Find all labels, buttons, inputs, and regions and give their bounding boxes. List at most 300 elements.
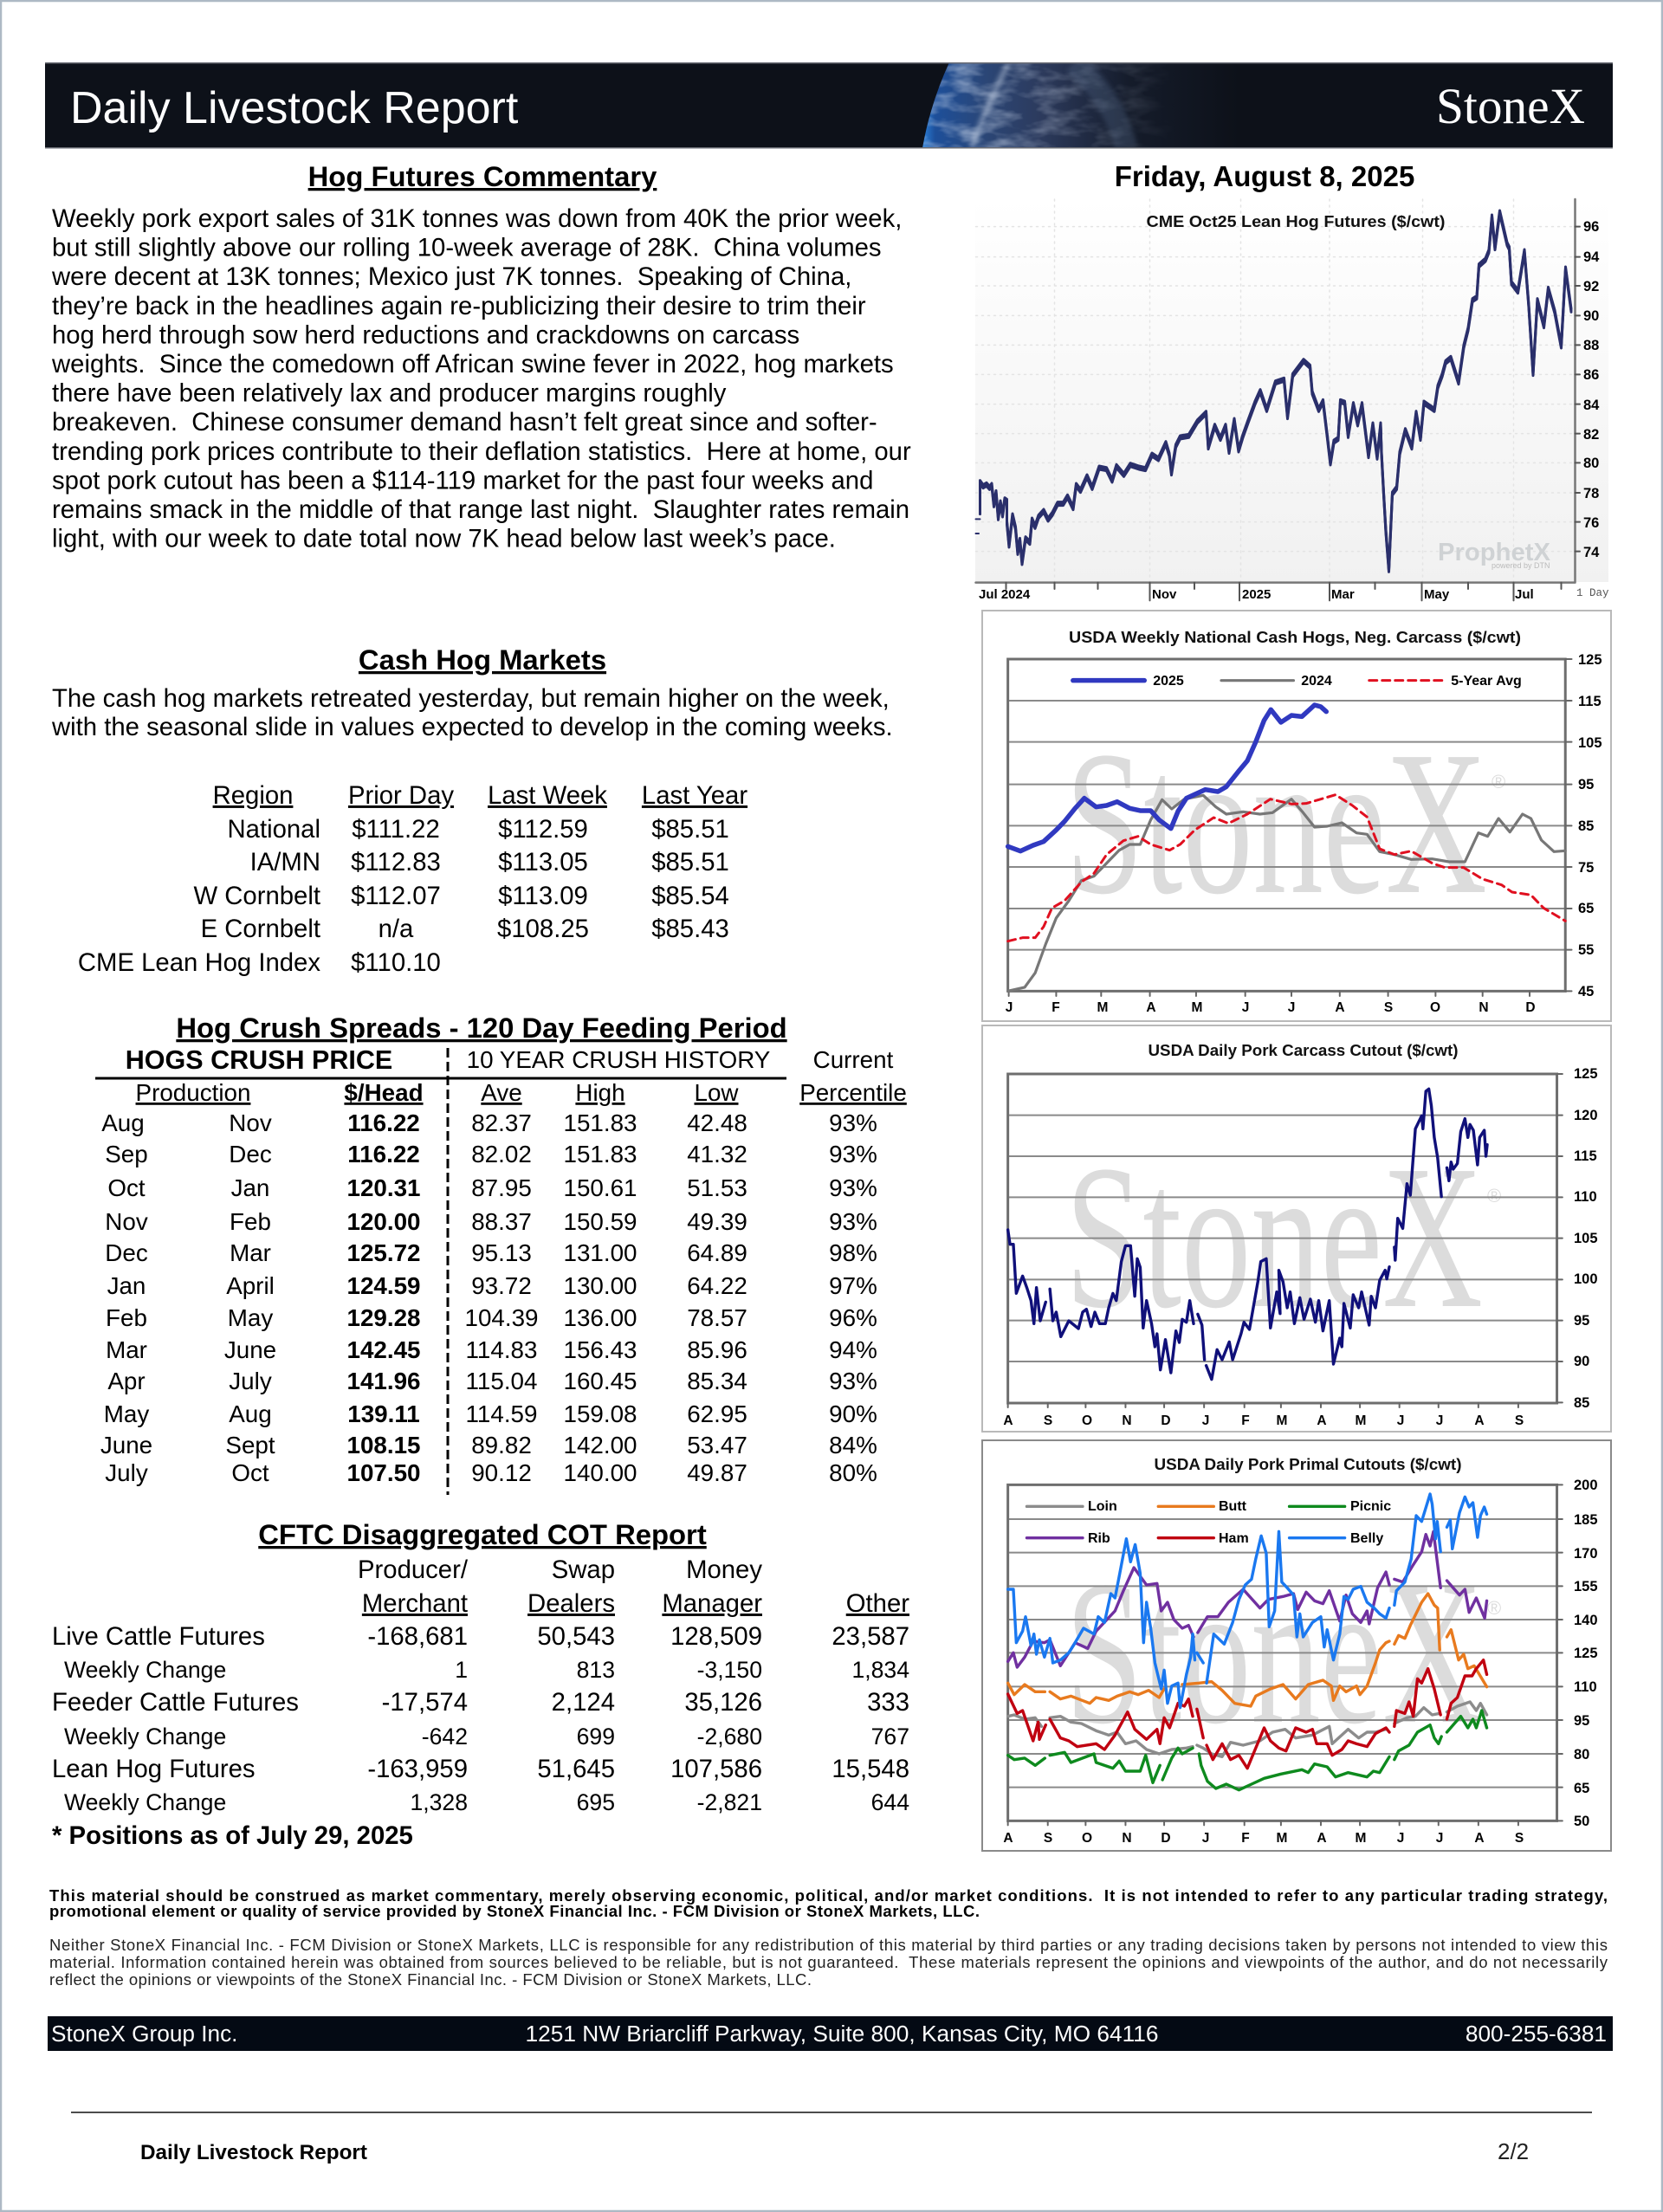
- CFTC table: Other: [846, 1589, 909, 1618]
- hog crush table: 150.61: [563, 1174, 637, 1201]
- y axis labels: 45: [1578, 984, 1594, 999]
- price axis labels: 86: [1583, 367, 1599, 383]
- hog crush table: Feb: [230, 1208, 271, 1235]
- hog crush table: 140.00: [563, 1459, 637, 1486]
- cash hog table: IA/MN: [250, 848, 320, 876]
- watermark: ProphetX: ProphetX: [1438, 539, 1551, 566]
- contact footer bar: StoneX Group Inc.: [51, 2021, 237, 2047]
- CFTC table: Producer/: [358, 1556, 469, 1584]
- series: 2025: [1008, 705, 1326, 851]
- month labels: O: [1430, 1000, 1440, 1015]
- hog crush table: 150.59: [563, 1208, 637, 1235]
- hog crush table: 136.00: [563, 1304, 637, 1331]
- cash hog table: Prior Day: [348, 781, 454, 810]
- report title: Daily Livestock Report: [70, 83, 519, 133]
- CFTC table: 15,548: [832, 1755, 909, 1783]
- date axis labels: [979, 587, 1609, 602]
- hog crush table: 88.37: [471, 1208, 532, 1235]
- hog crush table: Mar: [230, 1239, 271, 1266]
- month labels: M: [1356, 1413, 1366, 1428]
- StoneX watermark: ®: [1487, 1597, 1501, 1619]
- hog crush table: 142.45: [346, 1336, 421, 1363]
- price axis labels: 76: [1583, 515, 1599, 531]
- price axis labels: 74: [1583, 545, 1600, 560]
- month labels: J: [1436, 1831, 1443, 1846]
- y axis labels: 115: [1578, 694, 1602, 709]
- hog crush table: 49.87: [687, 1459, 747, 1486]
- hog crush table: Production: [136, 1079, 250, 1106]
- y axis labels: 125: [1574, 1646, 1598, 1661]
- y axis labels: 105: [1574, 1231, 1598, 1246]
- cash hog table: W Cornbelt: [193, 882, 320, 910]
- hog crush table: Aug: [229, 1400, 272, 1427]
- CFTC table: Weekly Change: [64, 1657, 226, 1683]
- CFTC table: 35,126: [684, 1688, 762, 1717]
- month labels: S: [1515, 1831, 1524, 1846]
- legend labels: Rib: [1088, 1531, 1110, 1546]
- price axis labels: 90: [1583, 308, 1599, 324]
- commentary text block: were decent at 13K tonnes; Mexico just 7K tonnes. Speaking of China,: [51, 262, 851, 291]
- hog crush table: 116.22: [347, 1109, 420, 1136]
- hog crush table: Dec: [229, 1141, 272, 1167]
- hog crush table: 95.13: [471, 1239, 532, 1266]
- hog crush table: Ave: [481, 1079, 522, 1106]
- month labels: D: [1161, 1831, 1171, 1846]
- y axis labels: 200: [1574, 1478, 1598, 1493]
- cash hog paragraph: with the seasonal slide in values expected to develop in the coming weeks.: [51, 713, 893, 741]
- CFTC table: 1,328: [410, 1789, 468, 1815]
- hog crush table: 114.59: [466, 1400, 537, 1427]
- month labels: J: [1436, 1413, 1443, 1428]
- y axis labels: 115: [1574, 1148, 1597, 1164]
- hog crush table: 87.95: [471, 1174, 532, 1201]
- month labels: S: [1515, 1413, 1524, 1428]
- hog crush table: 94%: [829, 1336, 877, 1363]
- legend labels: 5-Year Avg: [1451, 674, 1522, 689]
- hog crush table: Low: [695, 1079, 739, 1106]
- chart title: USDA Daily Pork Primal Cutouts ($/cwt): [1154, 1456, 1462, 1473]
- month labels: A: [1335, 1000, 1345, 1015]
- hog crush table: July: [229, 1368, 272, 1394]
- CFTC table: Lean Hog Futures: [52, 1755, 256, 1783]
- StoneX watermark: ®: [1492, 771, 1505, 792]
- hog crush table: Current: [813, 1046, 894, 1073]
- hog crush table: 64.89: [687, 1239, 747, 1266]
- month labels: S: [1384, 1000, 1393, 1015]
- y axis labels: 125: [1578, 652, 1602, 668]
- series: 2024: [1008, 795, 1565, 991]
- commentary text block: trending pork prices contribute to their deflation statistics. Here at home, our: [52, 437, 911, 466]
- commentary text block: Weekly pork export sales of 31K tonnes was down from 40K the prior week,: [52, 204, 902, 233]
- series: 5-year average: [1008, 795, 1565, 941]
- page footer: [71, 2112, 1592, 2164]
- cash hog table: $111.22: [352, 815, 440, 844]
- y axis labels: [1578, 652, 1602, 999]
- month labels: A: [1474, 1413, 1485, 1428]
- y axis labels: 120: [1574, 1108, 1598, 1123]
- month labels: M: [1192, 1000, 1202, 1015]
- legend labels: Butt: [1219, 1499, 1247, 1514]
- y axis labels: [1574, 1066, 1598, 1411]
- hog crush table: 159.08: [563, 1400, 637, 1427]
- CFTC table: 2,124: [552, 1688, 615, 1717]
- hog crush table: 90%: [829, 1400, 877, 1427]
- hog crush table: Mar: [106, 1336, 147, 1363]
- month labels: [1006, 1000, 1536, 1015]
- y axis labels: 95: [1578, 777, 1594, 792]
- contact footer bar: [48, 2016, 1613, 2051]
- contact footer bar: 800-255-6381: [1466, 2021, 1607, 2047]
- date axis labels: Jul: [1515, 587, 1534, 602]
- CFTC table: 699: [577, 1724, 615, 1750]
- hog crush table: 142.00: [563, 1432, 637, 1458]
- hog crush table: July: [105, 1459, 148, 1486]
- y axis labels: 105: [1578, 735, 1602, 751]
- CFTC table: 1: [455, 1657, 468, 1683]
- month labels: J: [1006, 1000, 1013, 1015]
- hog crush table: Feb: [106, 1304, 147, 1331]
- CFTC table: 695: [577, 1789, 615, 1815]
- legend labels: Picnic: [1350, 1499, 1391, 1514]
- hog crush table: 53.47: [687, 1432, 747, 1458]
- hog crush table: 93.72: [471, 1272, 532, 1299]
- month labels: M: [1097, 1000, 1108, 1015]
- y axis labels: 65: [1574, 1781, 1589, 1796]
- CFTC table: -17,574: [382, 1688, 468, 1717]
- cash hog table: Last Year: [642, 781, 747, 810]
- hog crush table: April: [226, 1272, 275, 1299]
- y axis labels: 125: [1574, 1066, 1598, 1082]
- CFTC table: 333: [867, 1688, 909, 1717]
- CFTC table: 50,543: [537, 1622, 615, 1651]
- y axis labels: 50: [1574, 1814, 1589, 1829]
- cash hog table: $108.25: [497, 915, 589, 943]
- chart title: CME Oct25 Lean Hog Futures ($/cwt): [1147, 213, 1446, 230]
- heading: CFTC report: CFTC Disaggregated COT Report: [258, 1518, 707, 1550]
- y axis labels: 90: [1574, 1354, 1589, 1369]
- month labels: F: [1241, 1413, 1250, 1428]
- hog crush table: May: [104, 1400, 149, 1427]
- CFTC table: Live Cattle Futures: [52, 1622, 265, 1651]
- CFTC table: Swap: [552, 1556, 615, 1584]
- heading: Cash Hog Markets: Cash Hog Markets: [359, 644, 606, 676]
- month labels: A: [1003, 1831, 1013, 1846]
- hog crush table: 41.32: [687, 1141, 747, 1167]
- legend labels: Ham: [1219, 1531, 1249, 1546]
- hog crush table: 93%: [829, 1141, 877, 1167]
- hog crush table: 131.00: [563, 1239, 637, 1266]
- CFTC table: Weekly Change: [64, 1724, 226, 1750]
- hog crush table: 156.43: [563, 1336, 637, 1363]
- month labels: [1003, 1831, 1524, 1846]
- CFTC table: 767: [871, 1724, 909, 1750]
- month labels: A: [1474, 1831, 1485, 1846]
- hog crush table: Dec: [105, 1239, 148, 1266]
- legend labels: 2025: [1153, 674, 1184, 689]
- month labels: A: [1146, 1000, 1156, 1015]
- hog crush table: High: [575, 1079, 625, 1106]
- cash hog table: $85.43: [651, 915, 729, 943]
- hog crush table: June: [100, 1432, 152, 1458]
- cash hog table: Last Week: [488, 781, 607, 810]
- legend swatches: [1026, 1506, 1345, 1538]
- date axis labels: Mar: [1331, 587, 1355, 602]
- commentary text block: weights. Since the comedown off African swine fever in 2022, hog markets: [51, 350, 894, 378]
- series: rib: [1008, 1531, 1487, 1667]
- cash hog table: $85.51: [651, 848, 729, 876]
- hog crush table: 93%: [829, 1174, 877, 1201]
- commentary text block: [51, 204, 911, 553]
- hog crush table: Nov: [105, 1208, 148, 1235]
- price axis labels: 96: [1583, 219, 1599, 235]
- hog crush table: 160.45: [563, 1368, 637, 1394]
- hog crush table: 98%: [829, 1239, 877, 1266]
- line plot: [1008, 1074, 1563, 1407]
- price axis labels: 82: [1583, 427, 1599, 443]
- series: picnic: [1008, 1711, 1487, 1790]
- page footer: Daily Livestock Report: [140, 2141, 367, 2164]
- hog crush table: 10 YEAR CRUSH HISTORY: [467, 1046, 770, 1073]
- hog crush table: Jan: [231, 1174, 269, 1201]
- CFTC table: * Positions as of July 29, 2025: [52, 1821, 413, 1850]
- cash hog table: CME Lean Hog Index: [78, 948, 320, 977]
- CFTC table: 1,834: [851, 1657, 909, 1683]
- hog crush table: Percentile: [799, 1079, 907, 1106]
- month labels: N: [1479, 1000, 1489, 1015]
- y axis labels: 110: [1574, 1189, 1597, 1205]
- commentary text block: they’re back in the headlines again re-publicizing their desire to trim their: [52, 292, 866, 320]
- hog crush table: Sept: [225, 1432, 275, 1458]
- disclaimer: regular: Neither StoneX Financial Inc. - FCM Division or StoneX Markets, LLC is responsible for any redistribution of this material by third parties or any trading decisions taken by persons not intended to view this: [49, 1936, 1608, 1954]
- CFTC table: Manager: [662, 1589, 762, 1618]
- CFTC table: Feeder Cattle Futures: [52, 1688, 299, 1717]
- hog crush table: May: [228, 1304, 273, 1331]
- month labels: N: [1122, 1413, 1132, 1428]
- hog crush table: 124.59: [346, 1272, 421, 1299]
- hog crush table: 82.37: [471, 1109, 532, 1136]
- heading: Hog Futures Commentary: Hog Futures Commentary: [308, 160, 657, 192]
- CFTC table: Money: [686, 1556, 762, 1584]
- chart: CME Oct25 Lean Hog Futures: [975, 198, 1609, 602]
- y axis labels: 55: [1578, 942, 1594, 958]
- legend labels: [1088, 1499, 1391, 1546]
- hog crush table: Nov: [229, 1109, 272, 1136]
- hog crush table: 151.83: [563, 1141, 637, 1167]
- hog crush table: 141.96: [346, 1368, 421, 1394]
- CFTC table: 51,645: [537, 1755, 615, 1783]
- cash hog table: National: [227, 815, 320, 844]
- month labels: A: [1317, 1413, 1327, 1428]
- month labels: A: [1317, 1831, 1327, 1846]
- commentary text block: light, with our week to date total now 7K head below last week’s pace.: [52, 525, 836, 553]
- hog crush table: Jan: [107, 1272, 146, 1299]
- disclaimer: regular: material. Information contained herein was obtained from sources believed to be reliable, but is not guaranteed. These materials represent the opinions and viewpoints of the author, and do not necessarily: [49, 1953, 1608, 1971]
- month labels: [1003, 1413, 1524, 1428]
- commentary text block: breakeven. Chinese consumer demand hasn’t felt great since and softer-: [52, 408, 877, 437]
- hog crush table: Sep: [105, 1141, 148, 1167]
- disclaimer: bold: promotional element or quality of service provided by StoneX Financial Inc. - FCM Division or StoneX Markets, LLC.: [49, 1902, 980, 1920]
- hog crush table: 114.83: [466, 1336, 537, 1363]
- commentary text block: hog herd through sow herd reductions and crackdowns on carcass: [52, 320, 799, 349]
- StoneX watermark: ®: [1487, 1185, 1501, 1206]
- date axis labels: May: [1424, 587, 1450, 602]
- month labels: F: [1241, 1831, 1250, 1846]
- series: ham: [1008, 1660, 1487, 1769]
- series: butt: [1008, 1594, 1487, 1706]
- header banner: [45, 62, 1613, 149]
- panel: weekly national cash hogs chart: [982, 611, 1611, 1021]
- series: loin: [1008, 1702, 1487, 1756]
- price axis labels: 94: [1583, 249, 1600, 265]
- y axis labels: 80: [1574, 1747, 1589, 1762]
- y axis labels: 65: [1578, 901, 1594, 916]
- cash hog table: Region: [213, 781, 293, 810]
- line plot: [1008, 659, 1572, 996]
- month labels: J: [1202, 1413, 1209, 1428]
- y axis labels: 95: [1574, 1713, 1589, 1729]
- CFTC table: -642: [422, 1724, 468, 1750]
- month labels: J: [1202, 1831, 1209, 1846]
- cash hog table: [78, 781, 747, 977]
- series: belly: [1008, 1494, 1487, 1708]
- month labels: S: [1044, 1413, 1052, 1428]
- hog crush table: 93%: [829, 1109, 877, 1136]
- CFTC table: [52, 1556, 909, 1850]
- CFTC table: 107,586: [670, 1755, 762, 1783]
- hog crush table: 125.72: [346, 1239, 421, 1266]
- date axis labels: Jul 2024: [979, 587, 1031, 602]
- cash hog table: $85.54: [651, 882, 729, 910]
- CFTC table: Weekly Change: [64, 1789, 226, 1815]
- y axis labels: 85: [1574, 1395, 1589, 1411]
- hog crush table: 104.39: [464, 1304, 539, 1331]
- CFTC table: -163,959: [367, 1755, 468, 1783]
- month labels: M: [1277, 1831, 1287, 1846]
- month labels: O: [1082, 1413, 1092, 1428]
- CFTC table: 23,587: [832, 1622, 909, 1651]
- y axis labels: 75: [1578, 860, 1594, 876]
- price axis labels: 80: [1583, 456, 1599, 471]
- line plot: [1008, 1484, 1563, 1825]
- y axis labels: 110: [1574, 1679, 1597, 1695]
- cash hog table: $112.83: [351, 848, 441, 876]
- y axis labels: [1574, 1478, 1598, 1829]
- disclaimer: regular: reflect the opinions or viewpoints of the StoneX Financial Inc. - FCM Division or StoneX Markets, LLC.: [49, 1970, 812, 1989]
- CFTC table: Merchant: [362, 1589, 468, 1618]
- CFTC table: 813: [577, 1657, 615, 1683]
- month labels: D: [1525, 1000, 1536, 1015]
- hog crush table: 42.48: [687, 1109, 747, 1136]
- page footer: 2/2: [1498, 2138, 1529, 2164]
- heading: Hog Crush Spreads: Hog Crush Spreads - 120 Day Feeding Period: [176, 1012, 787, 1044]
- hog crush table: 116.22: [347, 1141, 420, 1167]
- legend labels: Loin: [1088, 1499, 1117, 1514]
- commentary text block: remains smack in the middle of that range last night. Slaughter rates remain: [52, 495, 909, 524]
- hog crush table: 89.82: [471, 1432, 532, 1458]
- cash hog table: $85.51: [651, 815, 729, 844]
- hog crush table: 84%: [829, 1432, 877, 1458]
- hog crush table: June: [224, 1336, 276, 1363]
- month labels: J: [1397, 1831, 1404, 1846]
- hog crush table: 85.96: [687, 1336, 747, 1363]
- disclaimer: bold: [49, 1886, 1608, 1920]
- hog crush table: 97%: [829, 1272, 877, 1299]
- hog crush table: 78.57: [687, 1304, 747, 1331]
- panel: daily pork primal cutouts chart: [982, 1440, 1611, 1851]
- legend labels: 2024: [1301, 674, 1332, 689]
- hog crush table: Apr: [107, 1368, 146, 1394]
- hog crush table: $/Head: [344, 1079, 424, 1106]
- price axis labels: 78: [1583, 486, 1599, 501]
- disclaimer: bold: This material should be construed as market commentary, merely observing economic, political, and/or market conditions. It is not intended to refer to any particular trading strategy,: [49, 1886, 1608, 1905]
- cash hog table: E Cornbelt: [201, 915, 320, 943]
- hog crush table: 129.28: [346, 1304, 421, 1331]
- hog crush table: Aug: [101, 1109, 145, 1136]
- CFTC table: -2,821: [697, 1789, 762, 1815]
- hog crush table: 90.12: [471, 1459, 532, 1486]
- contact footer bar: 1251 NW Briarcliff Parkway, Suite 800, Kansas City, MO 64116: [525, 2021, 1159, 2047]
- date axis labels: 1 Day: [1576, 587, 1609, 599]
- disclaimer: regular: [49, 1936, 1608, 1989]
- hog crush table: 49.39: [687, 1208, 747, 1235]
- hog crush table: 82.02: [471, 1141, 532, 1167]
- legend labels: [1153, 674, 1522, 689]
- y axis labels: 170: [1574, 1546, 1598, 1562]
- CFTC table: -3,150: [697, 1657, 762, 1683]
- cash hog table: $112.07: [351, 882, 441, 910]
- hog crush table: 80%: [829, 1459, 877, 1486]
- y axis labels: 95: [1574, 1313, 1589, 1329]
- month labels: J: [1242, 1000, 1249, 1015]
- hog crush table: [95, 1045, 907, 1495]
- price axis labels: 84: [1583, 398, 1600, 413]
- month labels: M: [1277, 1413, 1287, 1428]
- month labels: D: [1161, 1413, 1171, 1428]
- chart title: USDA Weekly National Cash Hogs, Neg. Carcass ($/cwt): [1069, 629, 1521, 646]
- date: Friday, August 8, 2025: [1115, 160, 1414, 192]
- month labels: F: [1052, 1000, 1060, 1015]
- month labels: S: [1044, 1831, 1052, 1846]
- hog crush table: 108.15: [346, 1432, 421, 1458]
- y axis labels: 185: [1574, 1512, 1598, 1528]
- hog crush table: 120.31: [346, 1174, 421, 1201]
- watermark: ProphetX: powered by DTN: [1492, 561, 1550, 570]
- month labels: M: [1356, 1831, 1366, 1846]
- commentary text block: but still slightly above our rolling 10-week average of 28K. China volumes: [52, 234, 882, 262]
- month labels: O: [1082, 1831, 1092, 1846]
- y axis labels: 140: [1574, 1613, 1598, 1628]
- commentary text block: spot pork cutout has been a $114-119 market for the past four weeks and: [52, 466, 873, 495]
- price axis labels: 92: [1583, 279, 1599, 294]
- date axis labels: Nov: [1152, 587, 1177, 602]
- panel: daily pork carcass cutout chart: [982, 1025, 1611, 1432]
- hog crush table: 93%: [829, 1208, 877, 1235]
- hog crush table: 151.83: [563, 1109, 637, 1136]
- commentary text block: there have been relatively lax and producer margins roughly: [52, 379, 727, 408]
- y axis labels: 85: [1578, 818, 1594, 834]
- month labels: J: [1397, 1413, 1404, 1428]
- hog crush table: HOGS CRUSH PRICE: [126, 1045, 392, 1075]
- StoneX logo: StoneX: [1436, 78, 1585, 134]
- hog crush table: Oct: [231, 1459, 269, 1486]
- chart title: USDA Daily Pork Carcass Cutout ($/cwt): [1149, 1042, 1459, 1059]
- hog crush table: 115.04: [466, 1368, 537, 1394]
- CFTC table: -168,681: [367, 1622, 468, 1651]
- month labels: N: [1122, 1831, 1132, 1846]
- price axis labels: 88: [1583, 338, 1599, 353]
- cash hog paragraph: The cash hog markets retreated yesterday, but remain higher on the week,: [52, 684, 890, 713]
- cash hog table: $113.09: [498, 882, 588, 910]
